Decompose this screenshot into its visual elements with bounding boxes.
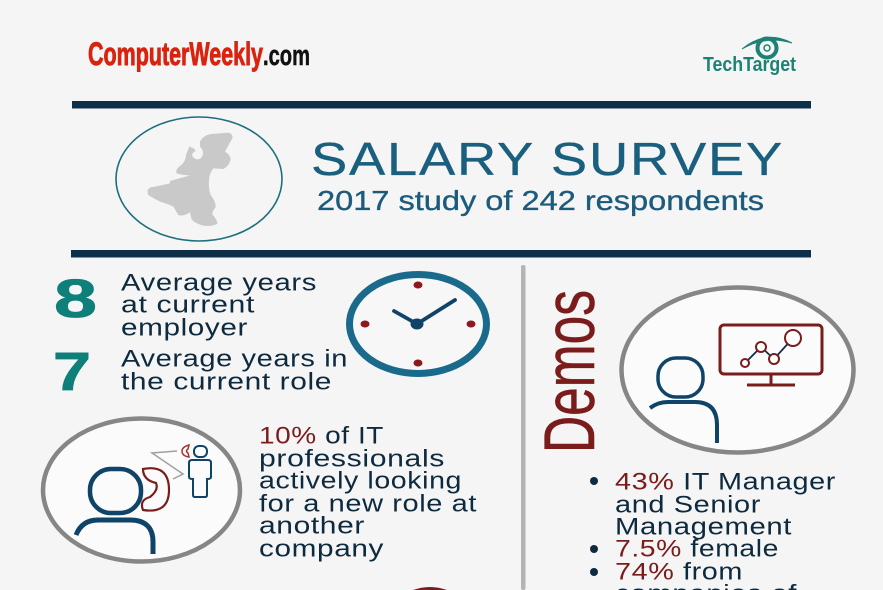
stat: 8 years at employer: 8 <box>54 269 97 329</box>
text: 10% job seekers <box>259 422 477 562</box>
text: 10% job seekers: another <box>259 512 365 540</box>
list: demographics: Management <box>615 514 792 540</box>
list: demographics: and Senior <box>615 492 761 518</box>
list: demographics: 43% IT Manager <box>615 468 836 496</box>
logo: TechTarget: TechTarget <box>703 54 796 76</box>
logo: ComputerWeekly.com: ComputerWeekly <box>88 36 263 72</box>
subtitle: 2017 study of 242 respondents <box>317 185 764 216</box>
logo: TechTarget <box>703 37 796 76</box>
stat: 7 years in role: 7 <box>53 342 91 402</box>
logo: ComputerWeekly.com: .com <box>263 40 310 72</box>
list: demographics: 74% from <box>615 558 743 586</box>
text: 10% job seekers: actively looking <box>259 468 462 494</box>
icon: clock <box>350 274 486 374</box>
title: SALARY SURVEY <box>311 133 784 185</box>
list: demographics: 7.5% female <box>615 536 779 562</box>
stat: 8 years at employer: at current <box>121 292 255 318</box>
text: 10% job seekers: for a new role at <box>259 490 477 518</box>
icon: person on phone <box>43 418 240 562</box>
stat: 8 years at employer <box>54 269 317 342</box>
stat: 7 years in role: the current role <box>121 368 332 396</box>
text: 10% job seekers: 10% of IT <box>259 422 384 450</box>
heading: Demos: Demos <box>531 290 610 453</box>
stat: 7 years in role <box>53 342 348 402</box>
vertical divider <box>521 265 526 590</box>
top rule <box>72 101 811 108</box>
text: 10% job seekers: company <box>259 536 384 562</box>
stat: 7 years in role: Average years in <box>121 346 348 372</box>
icon: Benelux map in circle <box>116 117 282 241</box>
stat: 8 years at employer: employer <box>121 314 248 342</box>
text: 10% job seekers: professionals <box>259 446 445 472</box>
stat: 8 years at employer: Average years <box>121 270 317 296</box>
bottom header rule <box>71 250 811 258</box>
next icon top edge <box>413 587 447 590</box>
list: demographics <box>590 468 836 590</box>
icon: person with monitor <box>622 288 854 452</box>
